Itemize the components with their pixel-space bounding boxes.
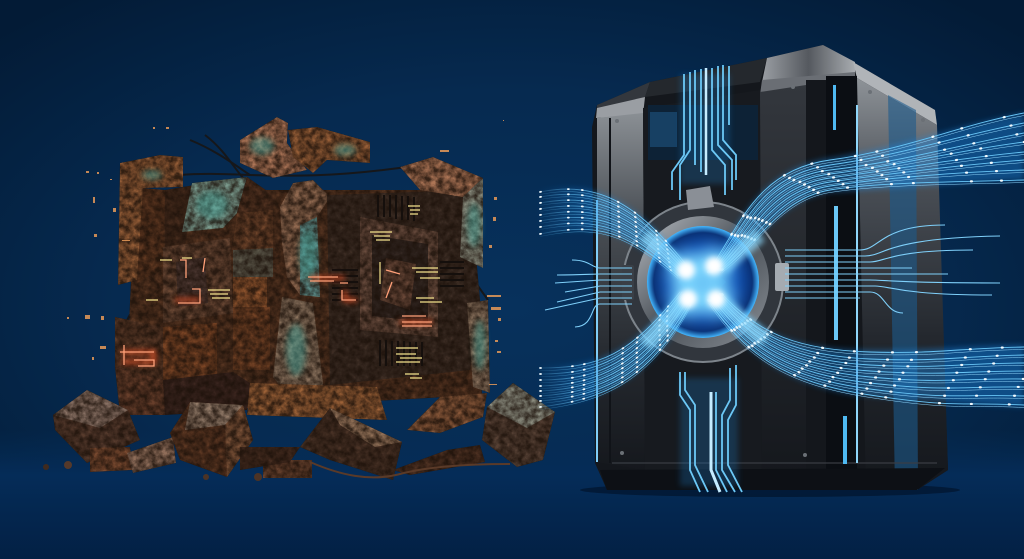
screen (648, 105, 758, 160)
side clamps (686, 186, 714, 210)
bright nodes (677, 257, 725, 308)
rubble: big block (170, 402, 253, 477)
dark interior of cube (125, 190, 482, 415)
glow beams (645, 235, 765, 345)
glowing circuit traces (120, 206, 442, 378)
center panel with screen (643, 90, 762, 480)
signal bundle: left (545, 260, 632, 327)
plate: top right corner (400, 157, 483, 197)
trace: board yellow (146, 258, 230, 300)
side face (857, 78, 948, 490)
rubble: small slab (90, 447, 133, 472)
trace glow wash (680, 74, 738, 486)
circuit traces: bottom (680, 365, 742, 492)
plate: top tile (240, 117, 307, 178)
plate: dark chip backing (327, 190, 480, 385)
plate: bottom beam (247, 383, 387, 420)
core diamond (678, 258, 726, 306)
rust plates (115, 117, 490, 433)
cabinet silhouette (592, 45, 948, 490)
blue core (647, 226, 759, 338)
rubble: right box (482, 383, 555, 467)
top caps (597, 82, 650, 110)
floor shadow (580, 483, 960, 497)
trace: chip (386, 270, 432, 326)
block: lower left (163, 323, 217, 380)
base (600, 468, 945, 490)
plate: central pillar lower (273, 297, 323, 407)
data stream: upper left (540, 187, 692, 278)
trace: lower left (120, 345, 154, 366)
left panel (597, 113, 645, 470)
spark particles (67, 120, 504, 385)
rusted broken cube (43, 117, 555, 481)
server cabinet (580, 45, 960, 497)
cables behind cube (120, 135, 488, 345)
rubble: left rock (53, 390, 140, 463)
vertical light bars (596, 85, 858, 464)
trace: center left (308, 277, 356, 300)
fallen rubble blocks (53, 383, 555, 480)
central core ring (622, 186, 789, 362)
right panel (760, 85, 806, 472)
data stream: upper right (706, 113, 1024, 274)
circuit traces: top (672, 65, 736, 200)
outer ring (623, 202, 783, 362)
rubble: flat rock (127, 437, 176, 473)
teal corrosion patches (142, 137, 486, 376)
data stream: lower right (708, 294, 1024, 408)
plate: left frame (118, 155, 183, 285)
node halo (669, 249, 733, 316)
rubble: low pile (393, 445, 485, 475)
plate: right lower (467, 300, 490, 393)
blue band on side (888, 95, 918, 490)
plate: top right tile (288, 127, 370, 173)
plate: central pillar upper (280, 180, 330, 297)
chip frame (360, 217, 438, 337)
block: left board (163, 238, 233, 323)
slot column (826, 76, 857, 490)
trace: left board (178, 289, 200, 303)
screws (615, 85, 925, 457)
glowing X center (645, 235, 765, 345)
rubble: center block (300, 408, 402, 480)
data stream: lower left (540, 290, 694, 410)
block: center stack (232, 210, 273, 250)
heatsink fins (332, 195, 464, 366)
plate: teal tile (182, 177, 247, 232)
trace: chip yellow (370, 232, 442, 302)
signal bundle: right (785, 225, 1000, 313)
fallen debris and cable (43, 461, 510, 481)
